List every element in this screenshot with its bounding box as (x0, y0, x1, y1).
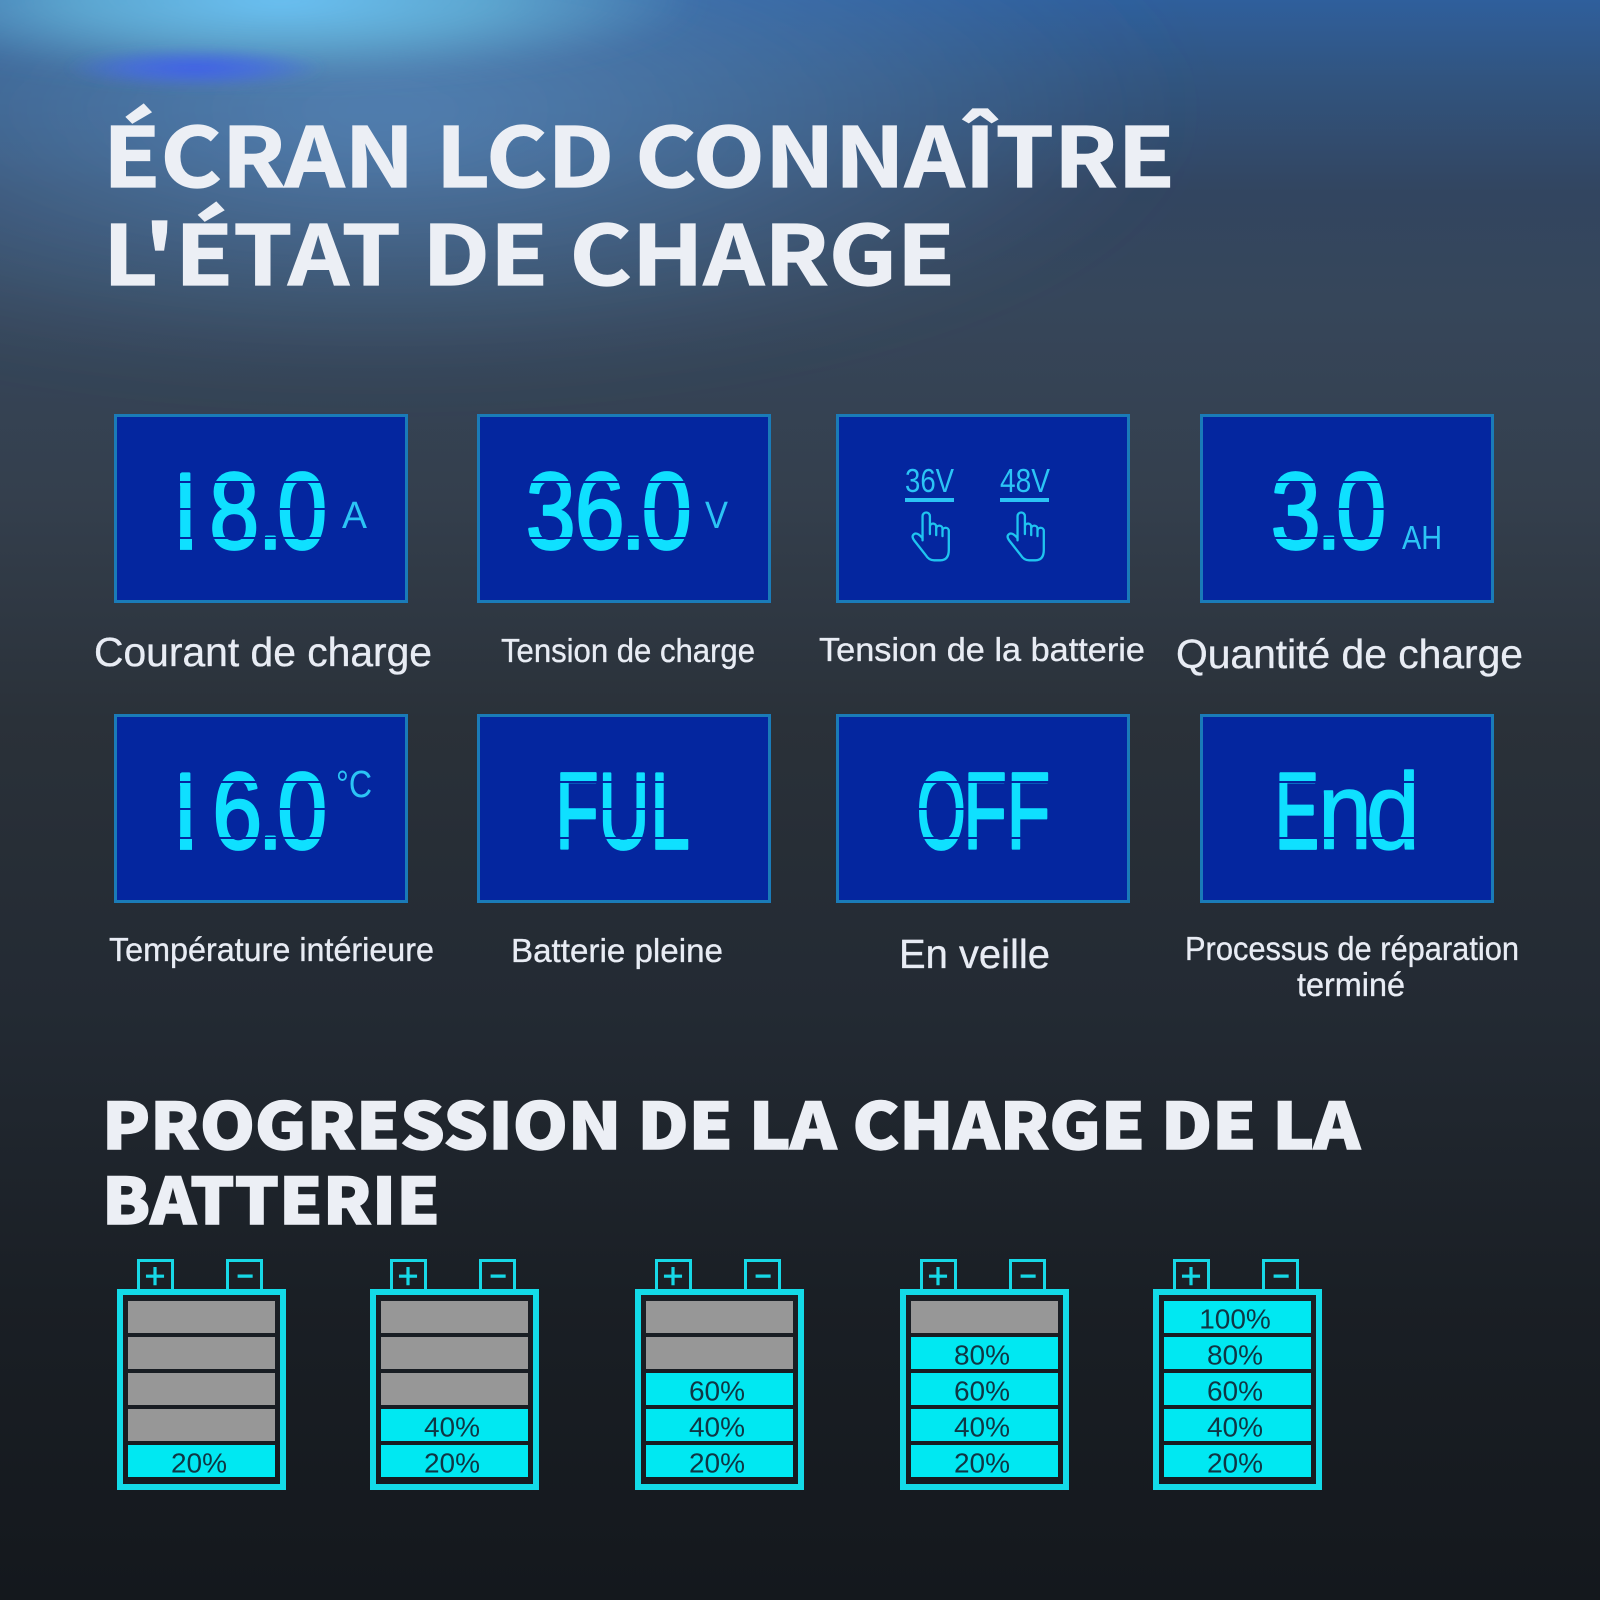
battery: 60%: + (662, 1255, 684, 1296)
battery: 60%: 40% (689, 1412, 745, 1442)
battery: 80%: − (1019, 1260, 1037, 1293)
label: end of process (1185, 930, 1519, 1003)
panel: internal temperature (116, 716, 406, 902)
battery: 60%: 60% (689, 1376, 745, 1406)
panel: battery full: FUL (555, 751, 690, 872)
panel: charging current: A (342, 495, 368, 537)
battery: 80% (903, 1255, 1066, 1487)
battery: 100%: + (1180, 1255, 1202, 1296)
panel: standby: O (917, 751, 966, 872)
battery: 100%: 20% (1207, 1448, 1263, 1478)
battery: 100% (1156, 1255, 1319, 1487)
label: end of process: terminé (1297, 966, 1405, 1003)
icon: hand 48V (1008, 513, 1044, 560)
battery: 40%: − (489, 1260, 507, 1293)
panel: charging current: 18.0 (159, 450, 327, 571)
title (103, 92, 1175, 309)
panel: standby: FF (963, 751, 1050, 872)
48V option: 48V (1000, 462, 1050, 499)
battery: 60%: 20% (689, 1448, 745, 1478)
battery: 40%: + (397, 1255, 419, 1296)
title: ÉCRAN LCD CONNAÎTRE (103, 92, 1175, 211)
battery: 100%: 80% (1207, 1340, 1263, 1370)
battery: 60%: − (754, 1260, 772, 1293)
battery: 40% (373, 1255, 536, 1487)
battery: 100%: 60% (1207, 1376, 1263, 1406)
battery: 20%: − (236, 1260, 254, 1293)
battery: 80%: 20% (954, 1448, 1010, 1478)
battery: 20%: 20% (171, 1448, 227, 1478)
panel: charge quantity: AH (1402, 519, 1442, 556)
label: charge quantity: Quantité de charge (1176, 631, 1523, 677)
battery: 100%: 100% (1199, 1304, 1271, 1334)
label: internal temperature: Température intérieure (109, 931, 434, 968)
battery: 80%: + (927, 1255, 949, 1296)
label: charging voltage: Tension de charge (501, 632, 755, 669)
battery: 100%: − (1272, 1260, 1290, 1293)
title: L'ÉTAT DE CHARGE (103, 190, 955, 309)
panel: charging voltage: 36.0 (526, 450, 691, 571)
battery: 80%: 80% (954, 1340, 1010, 1370)
label: battery voltage: Tension de la batterie (819, 631, 1145, 668)
heading: battery charge progress: BATTERIE (102, 1151, 440, 1243)
battery: 40%: 20% (424, 1448, 480, 1478)
battery: 80%: 40% (954, 1412, 1010, 1442)
panel: charge quantity: 3.0 (1271, 450, 1386, 571)
panel: end of process: E (1275, 752, 1319, 873)
heading: battery charge progress: PROGRESSION DE LA CHARGE DE LA (102, 1076, 1361, 1168)
label: battery full: Batterie pleine (511, 932, 723, 969)
panel: charge quantity (1202, 416, 1492, 602)
panel: charging voltage (478, 416, 770, 602)
36V option: 36V (905, 462, 954, 499)
battery: 40%: 40% (424, 1412, 480, 1442)
heading: battery charge progress (102, 1076, 1361, 1243)
battery: 80%: 60% (954, 1376, 1010, 1406)
label: charging current: Courant de charge (94, 629, 432, 675)
panel: internal temperature: °C (336, 764, 372, 806)
panel: end of process: nd (1318, 750, 1420, 872)
label: end of process: Processus de réparation (1185, 930, 1519, 967)
battery: 20% (120, 1255, 283, 1487)
panel: charging voltage: V (705, 495, 729, 537)
battery: 60% (638, 1255, 801, 1487)
panel: end of process (1202, 716, 1492, 902)
icon: hand 36V (913, 513, 949, 560)
panel: battery voltage (838, 416, 1128, 602)
panel: battery full (478, 716, 770, 902)
panel: internal temperature: 16.0 (159, 750, 327, 871)
label: standby: En veille (899, 931, 1050, 977)
panel: charging current (116, 416, 406, 602)
battery: 100%: 40% (1207, 1412, 1263, 1442)
battery: 20%: + (144, 1255, 166, 1296)
panel: standby (838, 716, 1128, 902)
